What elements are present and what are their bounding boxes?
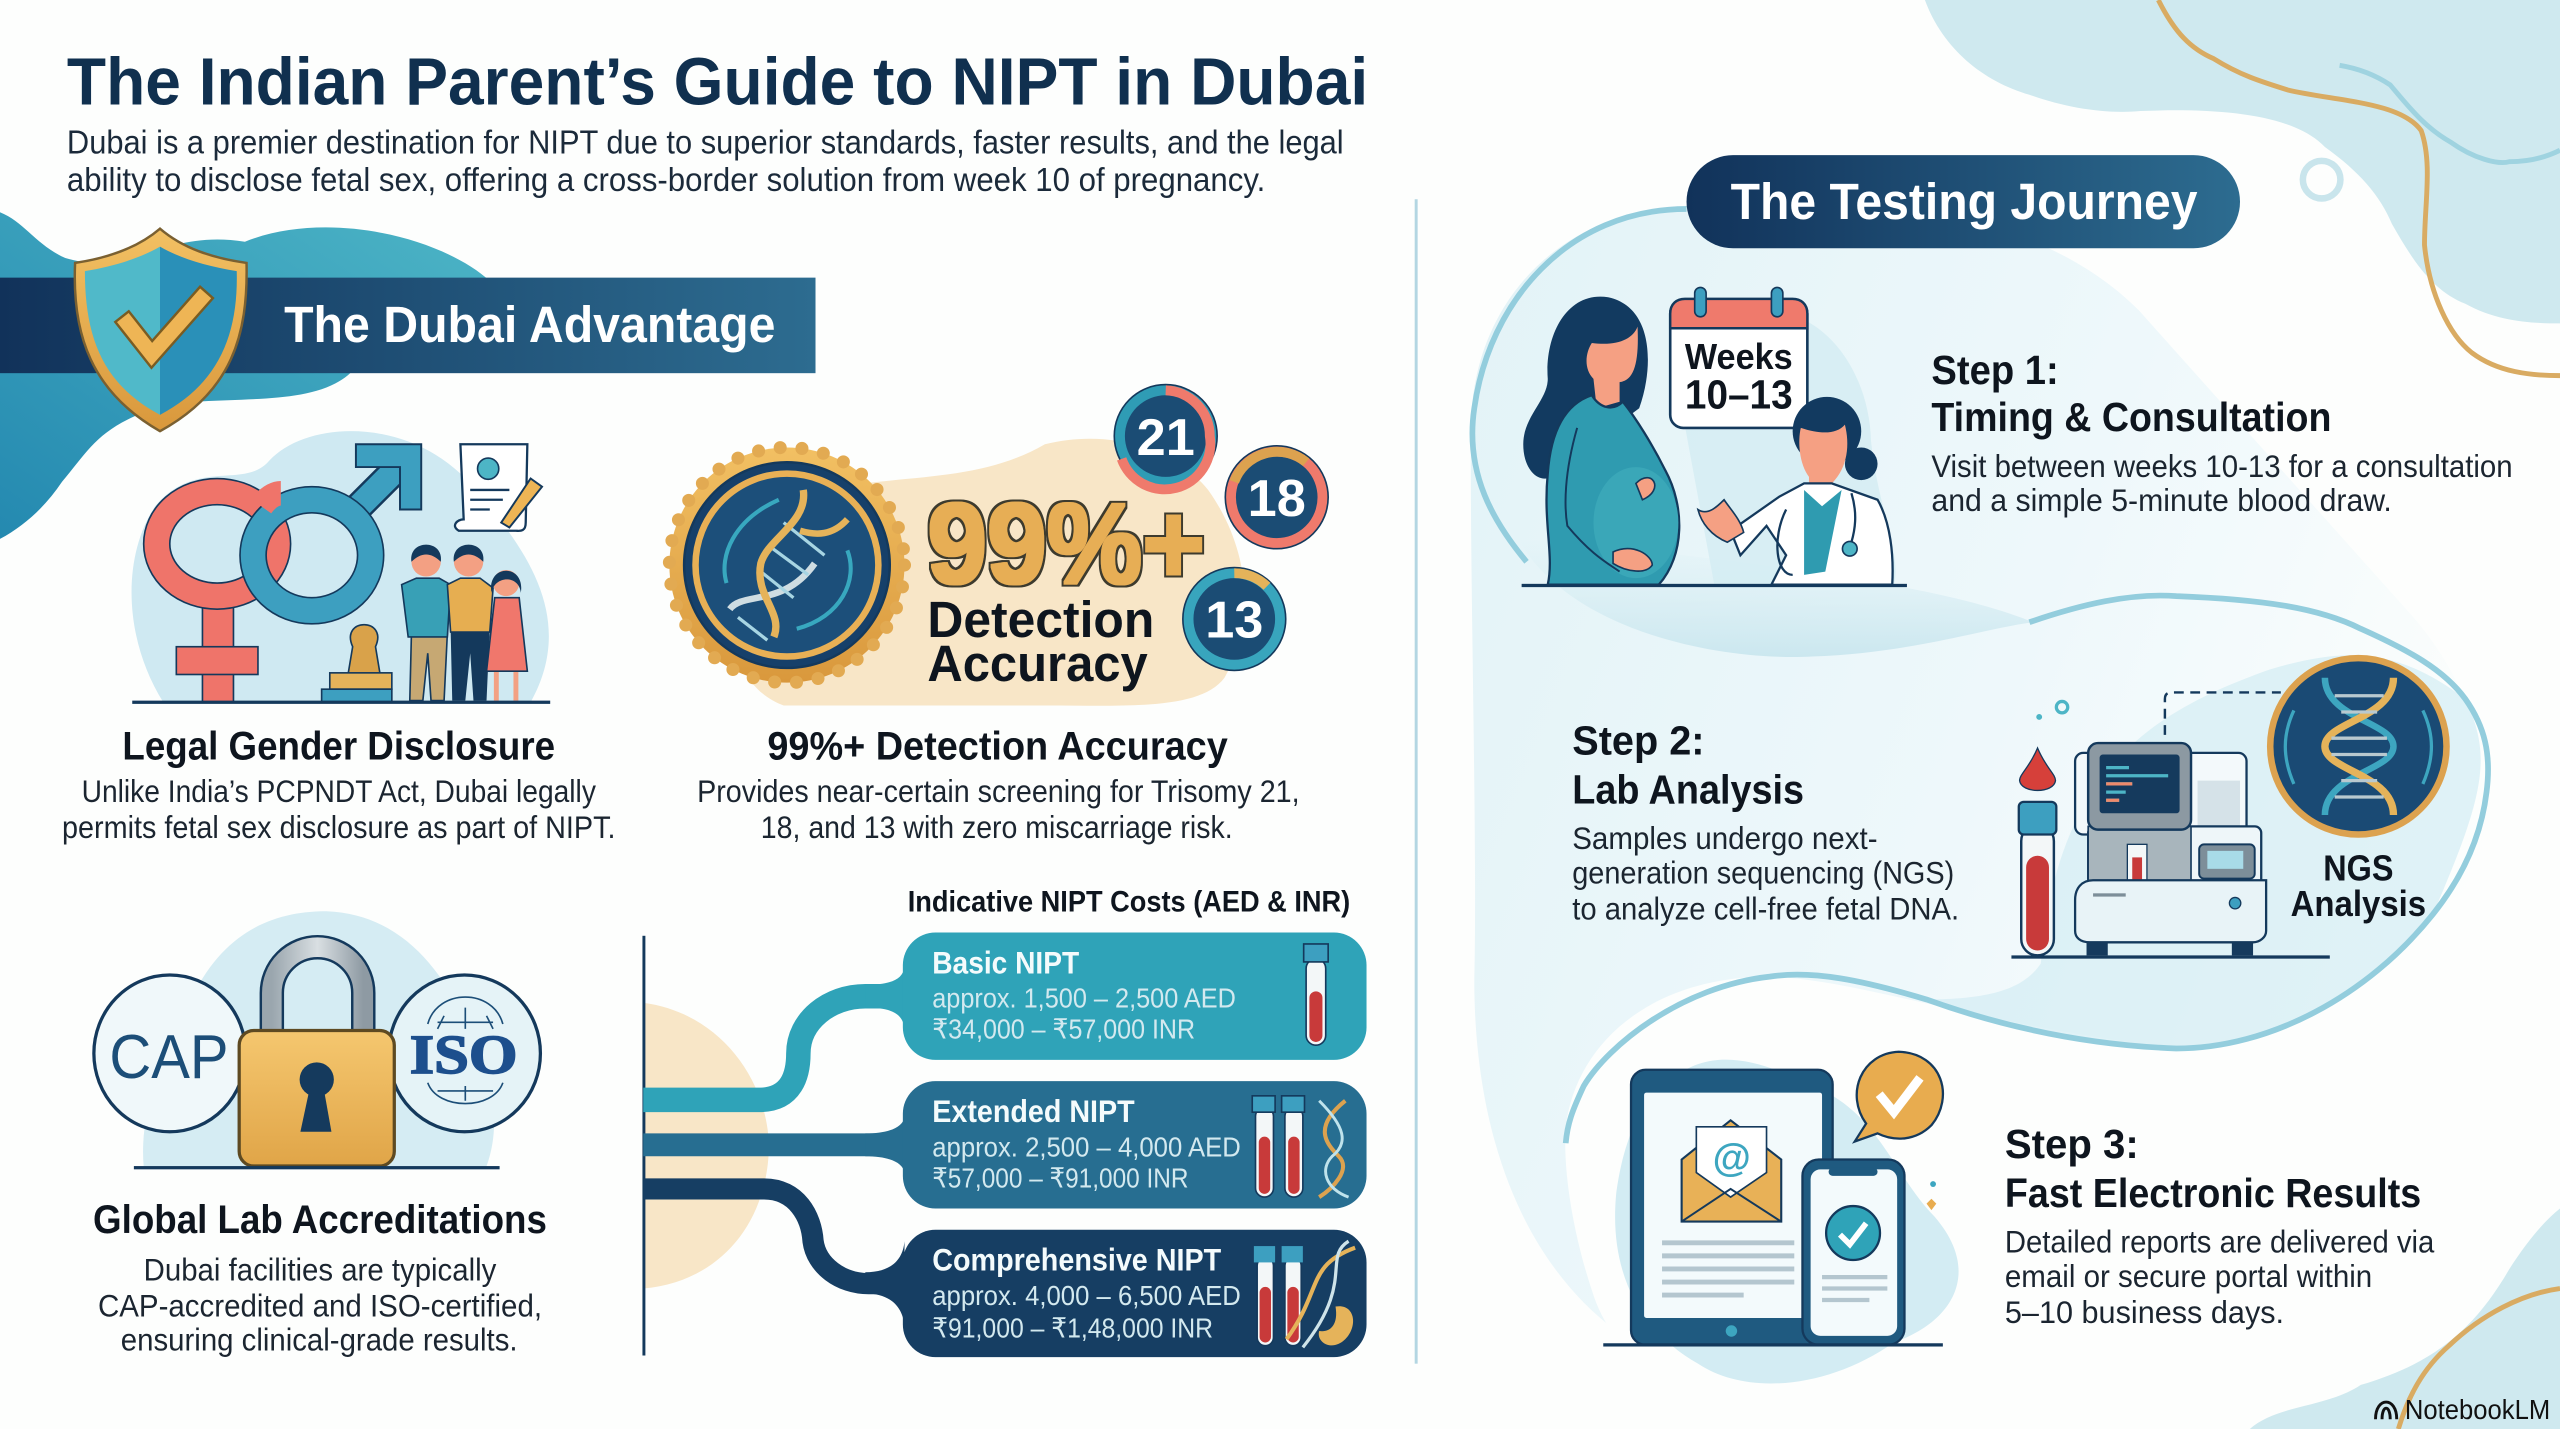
step 3 text (2005, 1121, 2435, 1330)
text: accuracy description (697, 773, 1300, 845)
card: Extended NIPT (865, 1081, 1367, 1209)
NGS Analysis label: NGS (2323, 847, 2393, 888)
decoration: bottom right blob and curve (2250, 1209, 2560, 1429)
female symbol (157, 492, 278, 702)
pill heading: The Testing Journey: The Testing Journey (1731, 173, 2198, 230)
baseline (134, 1166, 500, 1169)
icon: shield with check (75, 229, 247, 431)
heading: Fast Electronic Results (2005, 1170, 2421, 1216)
decoration: left teal blob (0, 212, 490, 539)
illustration: step 2 lab machine and DNA (2011, 658, 2447, 959)
NotebookLM watermark: NotebookLM (2405, 1394, 2550, 1425)
light blue blob (132, 431, 549, 702)
cost chart (642, 933, 1367, 1357)
heading: Step 2: (1572, 718, 1704, 764)
calendar (1670, 287, 1807, 428)
heading: Step 1: (1931, 347, 2059, 393)
step 1 outline (1472, 209, 1687, 562)
description: Detailed reports are delivered via (2005, 1224, 2435, 1260)
detection accuracy label (927, 591, 1154, 692)
step 3 device blob (1615, 1060, 1959, 1383)
envelope (1682, 1120, 1781, 1222)
card: Extended NIPT: Extended NIPT (932, 1094, 1135, 1129)
badge 21: 21 (1137, 409, 1195, 467)
illustration: legal gender disclosure (132, 431, 550, 704)
card: Comprehensive NIPT: Comprehensive NIPT (932, 1243, 1221, 1278)
CAP circle (94, 975, 246, 1132)
padlock (239, 947, 394, 1166)
illustration: lab accreditations (94, 911, 540, 1169)
ISO circle: ISO (410, 1025, 518, 1086)
heading (1572, 718, 1804, 813)
step 1 text (1931, 347, 2513, 518)
text: legal disclosure description: Unlike India’s PCPNDT Act, Dubai legally (82, 773, 596, 809)
text: accuracy description: 18, and 13 with zero miscarriage risk. (761, 809, 1233, 845)
doctor (1698, 397, 1893, 585)
step 2 text (1572, 718, 1959, 926)
text: accuracy description: Provides near-certain screening for Trisomy 21, (697, 773, 1300, 809)
description: generation sequencing (NGS) (1572, 855, 1954, 891)
99%+: 99%+ (927, 481, 1205, 608)
card: Basic NIPT (865, 933, 1367, 1060)
family (402, 545, 527, 701)
badge 18: 18 (1248, 470, 1306, 528)
badge 18 (1225, 446, 1328, 549)
pill heading: The Testing Journey (1687, 155, 2240, 248)
subtitle (67, 125, 1344, 199)
envelope: @ (1713, 1137, 1751, 1180)
heading: Global Lab Accreditations: Global Lab Accreditations (93, 1198, 547, 1242)
heading: Timing & Consultation (1931, 394, 2331, 440)
description: 5–10 business days. (2005, 1294, 2284, 1330)
text: accreditation description (98, 1251, 542, 1358)
document with pen (455, 444, 542, 531)
pregnant woman (1523, 297, 1679, 585)
sequencer machine (2075, 743, 2266, 955)
description: to analyze cell-free fetal DNA. (1572, 890, 1959, 926)
stamp (322, 625, 392, 702)
description: email or secure portal within (2005, 1258, 2372, 1294)
illustration: step 3 tablet and phone (1603, 1052, 1943, 1347)
detection accuracy label: Detection (927, 591, 1154, 648)
card: Extended NIPT: ₹57,000 – ₹91,000 INR (932, 1162, 1189, 1193)
badge 21 (1114, 385, 1217, 489)
heading: Legal Gender Disclosure: Legal Gender Disclosure (122, 724, 555, 768)
step 1 lower band (1518, 539, 2033, 657)
decoration: top right blob and curves (1925, 0, 2560, 376)
text: accreditation description: ensuring clinical-grade results. (121, 1322, 518, 1358)
baseline (2011, 955, 2330, 959)
description: Visit between weeks 10-13 for a consultation (1931, 448, 2513, 484)
card: Comprehensive NIPT: ₹91,000 – ₹1,48,000 INR (932, 1313, 1213, 1344)
vertical divider (1415, 199, 1418, 1364)
card: Basic NIPT: Basic NIPT (932, 945, 1079, 980)
journey background shapes (1471, 202, 2560, 1429)
tablet (1631, 1070, 1833, 1345)
baseline (1603, 1343, 1943, 1347)
icon: blood tube (1304, 944, 1328, 1045)
male symbol (253, 444, 421, 611)
heading: Step 3: (2005, 1121, 2139, 1167)
CAP circle: CAP (109, 1023, 229, 1092)
description (1931, 448, 2513, 518)
text: legal disclosure description (62, 773, 616, 845)
speech bubble check (1855, 1052, 1943, 1142)
calendar: 10–13 (1685, 371, 1793, 417)
banner: The Dubai Advantage (0, 278, 816, 373)
card: Comprehensive NIPT (865, 1230, 1367, 1357)
icon: tubes and DNA (1252, 1096, 1349, 1197)
heading: Lab Analysis (1572, 767, 1804, 813)
NGS Analysis label: Analysis (2291, 883, 2426, 924)
NGS Analysis label (2291, 847, 2426, 924)
connector navy (643, 1189, 914, 1284)
banner: The Dubai Advantage: The Dubai Advantage (284, 296, 776, 353)
baseline (1522, 584, 1907, 587)
blob behind calendar (1682, 310, 1896, 585)
subtitle: Dubai is a premier destination for NIPT due to superior standards, faster results, and the legal (67, 125, 1344, 162)
dashed connector (2165, 692, 2281, 735)
ISO circle (389, 975, 540, 1132)
badge 13 (1183, 568, 1286, 670)
sparkles (1927, 1181, 1936, 1210)
card: Extended NIPT: approx. 2,500 – 4,000 AED (932, 1131, 1241, 1162)
step 2 machine blob (1927, 655, 2481, 1048)
text: accreditation description: CAP-accredited and ISO-certified, (98, 1287, 542, 1323)
cream blob (730, 439, 1245, 706)
heading (2005, 1121, 2421, 1216)
baseline (132, 701, 550, 704)
title: The Indian Parent’s Guide to NIPT in Dubai (67, 45, 1368, 120)
step 2 outline (1566, 596, 2488, 1143)
phone (1802, 1160, 1904, 1345)
blob (143, 911, 494, 1166)
test tube (2019, 802, 2056, 955)
white cutout under step 2 (1565, 817, 2560, 1429)
description (1572, 820, 1959, 926)
illustration: detection accuracy (669, 385, 1328, 706)
badge 13: 13 (1205, 592, 1263, 650)
card: Basic NIPT: approx. 1,500 – 2,500 AED (932, 983, 1236, 1014)
detection accuracy label: Accuracy (927, 635, 1148, 692)
subtitle: ability to disclose fetal sex, offering a cross-border solution from week 10 of pregnancy. (67, 162, 1265, 199)
description: Samples undergo next- (1572, 820, 1878, 856)
card: Basic NIPT: ₹34,000 – ₹57,000 INR (932, 1014, 1195, 1045)
illustration: step 1 woman, calendar and doctor (1522, 287, 1907, 587)
gold scalloped badge (669, 447, 904, 683)
cream half ellipse (643, 1003, 769, 1289)
card: Comprehensive NIPT: approx. 4,000 – 6,500 AED (932, 1280, 1241, 1311)
vertical axis (642, 936, 645, 1356)
heading: 99%+ Detection Accuracy: 99%+ Detection Accuracy (767, 724, 1228, 768)
text: accreditation description: Dubai facilities are typically (144, 1251, 496, 1287)
description (2005, 1224, 2435, 1330)
connector mid (643, 1138, 914, 1152)
droplets (2020, 701, 2068, 790)
connector teal (643, 996, 914, 1100)
DNA circle (2270, 658, 2447, 835)
description: and a simple 5-minute blood draw. (1931, 482, 2392, 518)
heading (1931, 347, 2331, 440)
calendar: Weeks (1685, 336, 1793, 377)
text: legal disclosure description: permits fetal sex disclosure as part of NIPT. (62, 809, 616, 845)
icon: tubes, DNA and fetus (1254, 1241, 1355, 1347)
heading: Indicative NIPT Costs: Indicative NIPT Costs (AED & INR) (908, 885, 1350, 918)
